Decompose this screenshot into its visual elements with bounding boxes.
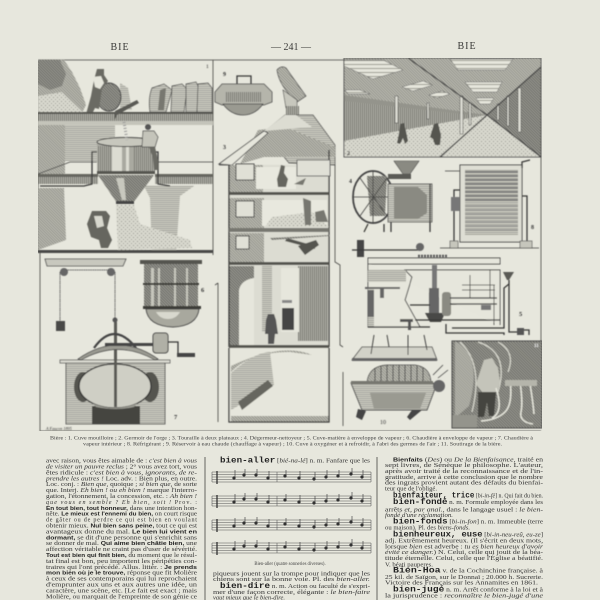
right text column: sept livres, de Sénèque le philosophe. L'auteur,	[385, 463, 544, 469]
lid, arch and crank	[78, 333, 195, 360]
figure caption: Bière : 1. Cuve mouilloire ; 2. Germoir de l'orge ; 3. Touraille à deux plateaux ; 4. Dégermeur-nettoyeur ; 5. Cuve-matière à enveloppe de vapeur ; 6. Chaudière à enveloppe de vapeur ; 7. Chaudière à	[50, 436, 534, 442]
upper floor	[38, 100, 213, 125]
left text column: tat final est bon, peu importent les péripéties con-	[46, 558, 197, 565]
right text column: bien-fonds [bi-in-fon ] n. m. Immeuble (terre	[393, 518, 543, 526]
left text column: Tout est bien qui finit bien, du moment que le résul-	[46, 553, 197, 559]
number 11: 11	[534, 344, 539, 349]
number 3: 3	[223, 145, 226, 151]
figure caption	[50, 436, 534, 448]
number 7: 7	[174, 414, 178, 421]
right text column: arrêts et, par anal., dans le langage usuel : le bien-	[385, 507, 543, 513]
bottom floor	[38, 250, 213, 253]
number 2: 2	[347, 151, 350, 157]
right text column: bien-jugé n. m. Arrêt conforme à la loi et à	[393, 586, 543, 594]
number 6: 6	[201, 287, 205, 294]
cellarman	[476, 358, 500, 392]
panel 2: germoir de l'orge	[344, 58, 541, 157]
number 9: 9	[223, 72, 226, 78]
middle column heading: bien-aller [bié-na-lé ] n. m. Fanfare que les	[220, 458, 371, 466]
left text column: avec raison, vous êtes aimable de : c'est bien à vous	[46, 459, 198, 465]
panel 6: chaudière à enveloppe	[140, 260, 205, 327]
middle column text: bien-dire n. m. Action ou faculté de s'expri-	[220, 583, 370, 591]
steeping vat	[40, 122, 170, 204]
workers in the attic	[270, 165, 330, 255]
left text column: nête. Le mieux est l'ennemi du bien, on court risque	[46, 512, 197, 518]
number 1: 1	[206, 64, 209, 70]
right text column: titude éternelle. Celui, celle que l'Église a béatifié.	[385, 554, 544, 562]
roof	[219, 115, 335, 165]
hoses	[481, 380, 534, 424]
left wall	[344, 97, 487, 141]
panel 5: cuve-matière	[352, 240, 529, 335]
panel 4: dégermeur-nettoyeur	[349, 161, 432, 232]
middle column text: chiens sont sur la bonne voie. Pl. des bien-aller.	[213, 577, 370, 583]
middle column text	[213, 571, 371, 600]
column dividers	[205, 457, 377, 600]
engraver signature: A Faucon 1895	[45, 426, 72, 431]
header: page number: — 241 —	[270, 42, 312, 53]
number 5: 5	[519, 311, 523, 318]
ceiling	[344, 58, 541, 157]
left text column: dormant, se dit d'une personne qui s'enrichit sans	[46, 535, 198, 541]
right text column: 25 kil. de Saïgon, sur le Donnaï ; 20.000 h. Sucrerie.	[385, 575, 544, 581]
agitator column	[425, 265, 451, 322]
arched cellar	[229, 348, 329, 422]
left text column	[45, 459, 198, 600]
skylights	[344, 59, 513, 104]
middle floor	[38, 162, 213, 184]
right text column: adj. Extrêmement heureux. (Il s'écrit en deux mots,	[385, 538, 544, 545]
central beam	[408, 58, 541, 157]
left text column: à ceux de ses contemporains qui lui reprochaient	[46, 577, 197, 583]
right text column: Victoire des Français sur les Annamites en 1861.	[385, 581, 539, 587]
right text column: bien-fondé n. m. Formule employée dans les	[393, 499, 544, 507]
number 10: 10	[380, 420, 386, 426]
number 4: 4	[349, 179, 352, 185]
right text column: après avoir traité de la reconnaissance et de l'in-	[385, 469, 543, 475]
left text column: avantageux donne du mal. Le bien lui vient en	[46, 529, 198, 535]
header: left running title: BIE	[110, 42, 130, 53]
right text column: teur que de l'obligé.	[385, 486, 438, 492]
left text column: caractère, une scène, etc. [Le fait est exact ; mais	[46, 587, 198, 594]
left text column: mon bien où je le trouve, réponse que fit Molière	[46, 570, 197, 577]
right text column: ou maison). Pl. des biens-fonds.	[385, 525, 470, 532]
right wall	[487, 67, 541, 157]
floors of the house	[229, 192, 329, 348]
man with barrel	[85, 69, 121, 118]
right text column: la jurisprudence : reconnaître le bien-jugé d'une	[385, 594, 543, 600]
left text column: d'emprunter aux uns et aux autres une idée, un	[46, 582, 197, 588]
kettle	[79, 318, 151, 409]
right text column: bienfaiteur, trice [bi-in-fè] n. Qui fait du bien.	[393, 492, 543, 500]
header: right running title: BIE	[457, 41, 477, 52]
right text column: fondé d'une réclamation.	[385, 512, 453, 519]
pulley beam and weight	[45, 259, 126, 331]
music caption: Bien-aller (quatre sonneries diverses).	[254, 562, 326, 567]
right text column: Bienfaits (Des ) ou De la Bienfaisance, traité en	[393, 456, 543, 464]
left text column: de visiter un pauvre reclus ; 2° vous avez tort, vous	[46, 464, 198, 470]
right text column: des ingrats provient autant des défauts du bienfai-	[385, 480, 543, 487]
brick furnace	[60, 360, 170, 424]
windows and shutters	[236, 160, 330, 249]
drive shaft	[352, 240, 448, 257]
left text column: se donner de mal. Qui aime bien châtie bien, une	[46, 541, 197, 547]
right text column	[385, 456, 544, 600]
panel 11: soutirage de la bière	[452, 341, 542, 428]
middle column text: mer d'une façon correcte, élégante : le bien-faire	[213, 589, 370, 596]
right text column: gratitude, arrive à cette conclusion que le nombre	[385, 475, 543, 481]
left text column: En tout bien, tout honneur, dans une intention hon-	[46, 506, 197, 512]
number 8: 8	[531, 225, 534, 231]
panel 7: chaudière à vapeur intérieur	[45, 259, 195, 431]
left text column: affection véritable ne craint pas d'user de sévérité.	[46, 546, 198, 553]
grain pile and worker below	[87, 205, 192, 250]
illustration frame	[38, 60, 541, 431]
dark sacks corner	[38, 60, 86, 113]
gearing and pipes	[365, 270, 504, 335]
panel 8: réfrigérant	[440, 160, 539, 248]
figure caption: vapeur intérieur ; 8. Réfrigérant ; 9. Réservoir à eau chaude (chauffage à vapeur) ; 10. Cuve à oxygéner et à refroidir, à l'abri des germes de l'air ; 11. Soutirage de la bière.	[83, 442, 502, 448]
left text column: êtes ridicule : c'est bien à vous, ignorants, de re-	[46, 470, 197, 476]
funnel and drain tap	[452, 272, 529, 335]
chimney cowl	[277, 67, 306, 116]
left text column: gation, l'étonnement, la concession, etc. : Ah bien !	[46, 494, 197, 500]
house walls	[219, 150, 329, 348]
engraved plate of brewing equipment	[38, 58, 542, 431]
lower hatched walls	[38, 125, 194, 253]
maltsters	[397, 123, 441, 145]
left text column: prendre les autres ! Loc. adv. : Bien plus, en outre.	[45, 476, 198, 482]
left text column: que. Interj. Eh bien ! ou eh bien ! marque l'interro-	[46, 488, 197, 494]
floor	[344, 115, 487, 157]
left text column: obtenir mieux. Nul bien sans peine, tout ce qui est	[46, 524, 197, 530]
left text column: de gâter ou de perdre ce qui est bien en voulant	[46, 518, 197, 524]
tank shell	[368, 258, 500, 327]
panel 1: cuve mouilloire	[38, 60, 213, 253]
right text column: bienheureux, euse [bi-in-neu-reû, eu-ze ]	[393, 532, 543, 540]
panel 10: cuve à oxygéner	[351, 365, 448, 426]
tank section	[368, 270, 406, 327]
columns	[395, 88, 521, 134]
right text column: V. béati pauperes.	[385, 562, 434, 568]
right text column: évité ce danger. ) N. Celui, celle qui jouit de la béa-	[385, 549, 543, 556]
left text column: traires qui l'ont précédé. Allus. littér. : Je prends	[46, 565, 197, 571]
panel 3: touraille à deux plateaux	[219, 67, 335, 422]
left text column: Loc. conj. : Bien que, quoique ; si bien que, de sorte	[46, 482, 197, 488]
hood	[352, 335, 437, 361]
right text column: Bien-Hoa v. de la Cochinchine française. à	[393, 568, 543, 576]
panel 9: réservoir à eau chaude	[215, 72, 272, 115]
right text column: lorsque bien est adverbe : tu es bien heureux d'avoir	[385, 544, 544, 550]
music score: four fanfares	[212, 468, 371, 555]
left text column: que vous en semble ? Eh bien, soit ! Prov. :	[46, 500, 197, 506]
worker on the vat	[142, 124, 158, 170]
sacks	[149, 82, 212, 112]
middle column text: piqueurs jouent sur la trompe pour indiquer que les	[213, 571, 371, 577]
man by the furnace	[265, 300, 294, 344]
